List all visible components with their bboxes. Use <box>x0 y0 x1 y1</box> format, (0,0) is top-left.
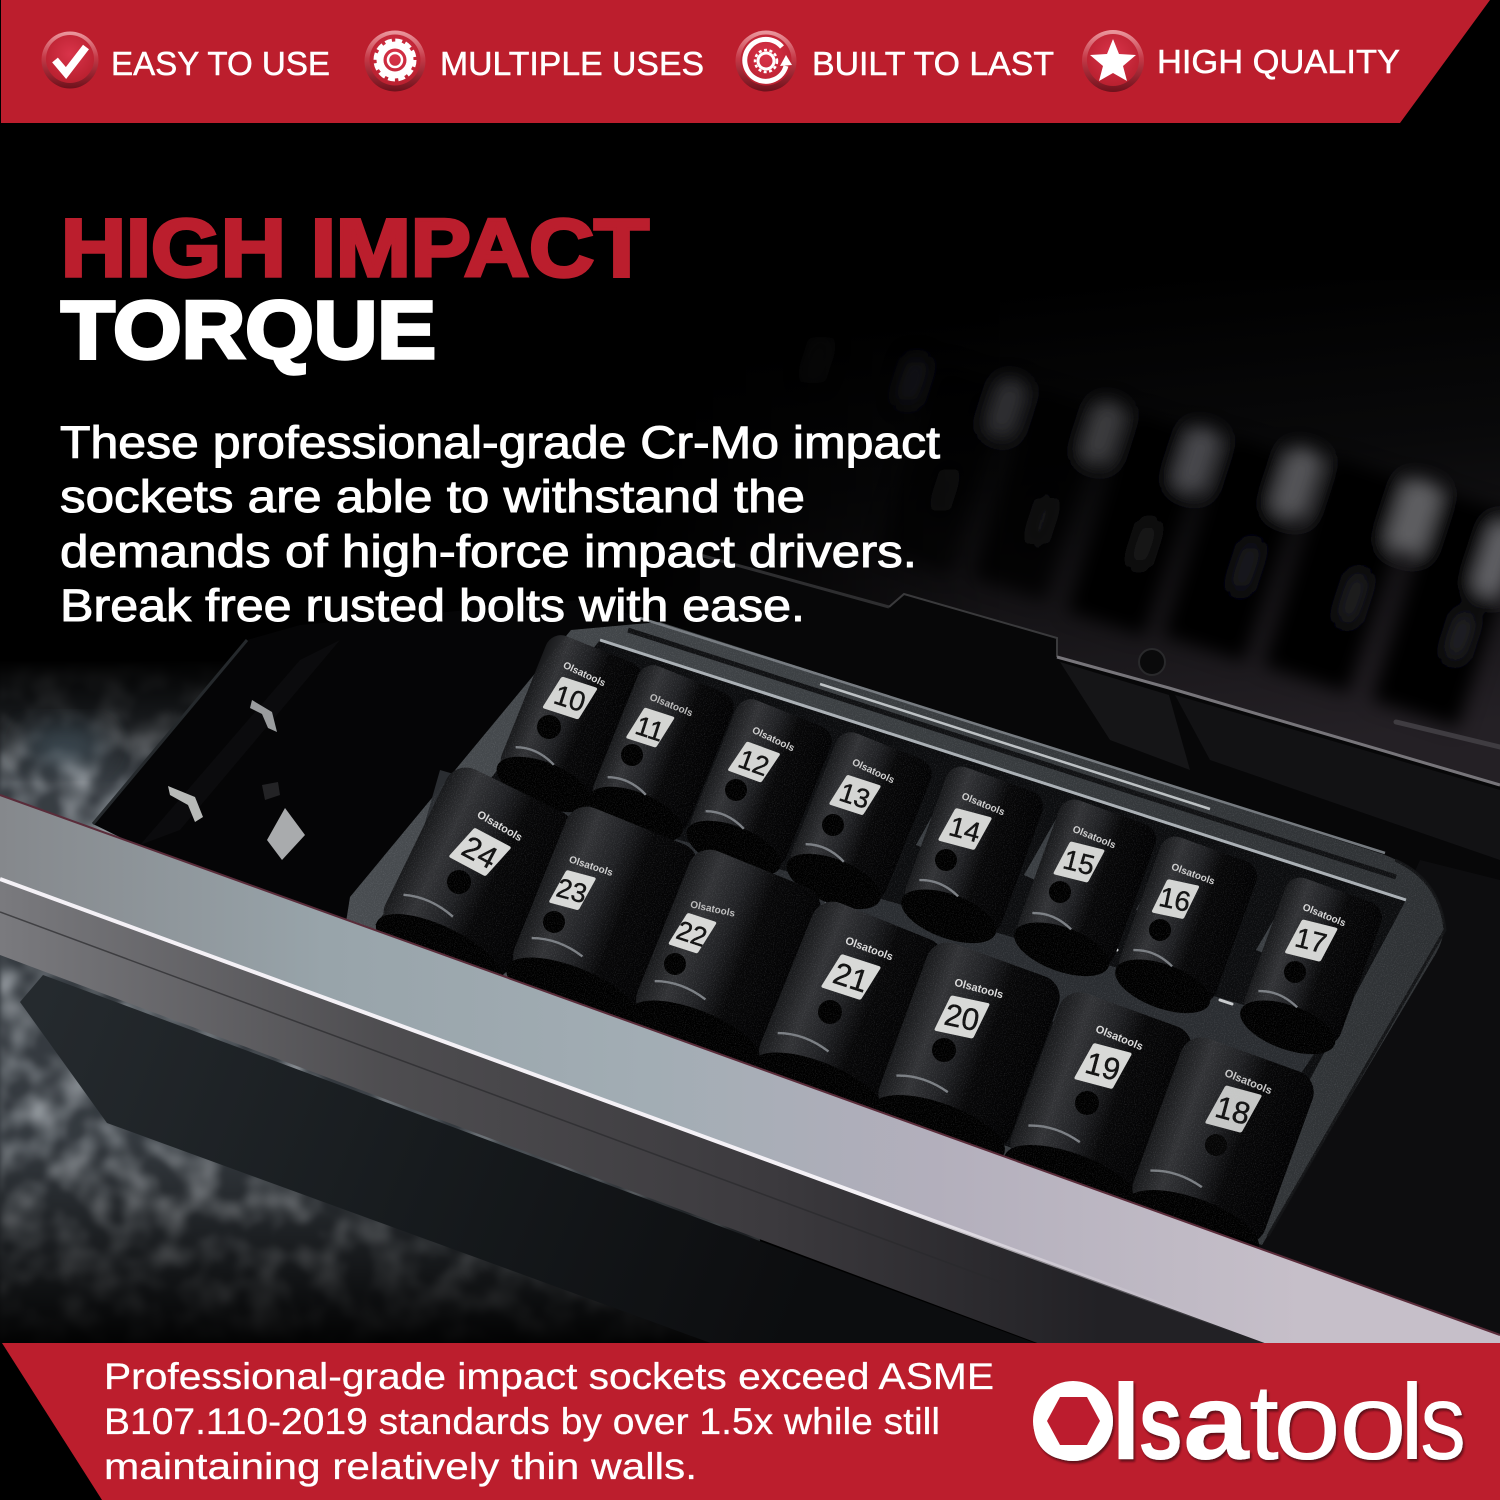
sockets, top row <box>489 630 1387 1066</box>
heading: HIGH IMPACT <box>61 203 649 294</box>
socket 10 <box>489 630 647 824</box>
socket 14: Olsatools <box>960 791 1007 818</box>
socket 21 <box>743 895 950 1138</box>
socket 22 <box>620 843 827 1086</box>
bottom red banner <box>2 1343 1500 1500</box>
socket 15: Olsatools <box>1071 824 1118 851</box>
logo: Olsatools <box>1029 1361 1466 1482</box>
icon: star button <box>1082 30 1144 92</box>
socket 13 <box>779 727 937 921</box>
icon: gear with cycle arrow button <box>736 30 796 92</box>
socket 23: Olsatools <box>567 854 615 879</box>
socket tray frame: 13 <box>819 892 841 913</box>
raised floor between socket rows <box>420 770 1330 1090</box>
socket 24: 24 <box>456 829 503 876</box>
socket 10: Olsatools <box>561 660 607 690</box>
body text: sockets are able to withstand the <box>60 471 805 522</box>
socket 24: Olsatools <box>475 809 524 844</box>
socket 17: 17 <box>1292 922 1330 959</box>
right side surface <box>1240 860 1500 1340</box>
socket 22: Olsatools <box>689 899 736 920</box>
socket 11: 11 <box>632 710 668 748</box>
socket 10: 10 <box>550 679 589 718</box>
standards text: maintaining relatively thin walls. <box>104 1446 697 1487</box>
body text: These professional-grade Cr-Mo impact <box>60 417 941 468</box>
embossed size numbers in tray: 12 <box>721 856 744 879</box>
socket 11 <box>581 660 739 854</box>
body text: Break free rusted bolts with ease. <box>60 580 805 631</box>
body text <box>60 417 941 631</box>
socket 16: 16 <box>1156 881 1193 918</box>
socket 14 <box>894 762 1048 955</box>
standards text: Professional-grade impact sockets exceed ASME <box>104 1356 994 1397</box>
lid of the case with clasp <box>700 555 1500 1000</box>
socket tray frame <box>340 618 1445 1245</box>
standards text: B107.110-2019 standards by over 1.5x while still <box>104 1401 940 1442</box>
socket 20: 20 <box>941 997 982 1038</box>
sockets, bottom row <box>366 760 1320 1273</box>
socket 17: Olsatools <box>1301 902 1348 929</box>
carpet floor <box>0 660 760 1350</box>
socket 17 <box>1233 873 1387 1066</box>
socket 21: 21 <box>829 956 873 999</box>
socket 13: 13 <box>836 777 874 815</box>
icon: gear button <box>364 30 426 92</box>
blurred sockets in the background <box>620 280 1500 860</box>
tray front face below the bar <box>20 975 1040 1345</box>
socket 15: 15 <box>1060 844 1098 881</box>
socket 18: 18 <box>1212 1089 1254 1132</box>
socket 14: 14 <box>946 810 984 848</box>
logo: Olsatools: t <box>1249 1361 1279 1482</box>
standards text <box>104 1356 994 1487</box>
socket 16: Olsatools <box>1170 862 1217 888</box>
feature: multiple uses: MULTIPLE USES <box>440 45 704 82</box>
socket 12: 12 <box>734 744 773 782</box>
socket 19: Olsatools <box>1094 1023 1145 1053</box>
logo: Olsatools: O <box>1029 1361 1113 1482</box>
socket 19 <box>996 986 1198 1228</box>
heading: TORQUE <box>61 285 436 376</box>
socket 20 <box>864 936 1066 1178</box>
socket 13: Olsatools <box>850 757 896 787</box>
logo: Olsatools: o <box>1339 1361 1407 1482</box>
logo: Olsatools: l <box>1111 1361 1141 1482</box>
silver tray edge bar <box>0 795 1500 1345</box>
socket 16 <box>1108 832 1262 1025</box>
socket 18: Olsatools <box>1223 1067 1274 1097</box>
socket 21: Olsatools <box>843 935 895 963</box>
feature: easy to use: EASY TO USE <box>111 45 330 82</box>
feature: multiple uses <box>364 30 704 92</box>
socket 12 <box>679 694 837 888</box>
heading <box>61 203 649 376</box>
logo: Olsatools: a <box>1183 1361 1250 1482</box>
logo: Olsatools: o <box>1273 1361 1341 1482</box>
socket 23: 23 <box>553 873 590 909</box>
body text: demands of high-force impact drivers. <box>60 526 917 577</box>
feature: built to last: BUILT TO LAST <box>812 45 1054 82</box>
socket 19: 19 <box>1082 1045 1124 1088</box>
socket 15 <box>1007 795 1161 988</box>
socket 20: Olsatools <box>953 977 1005 1001</box>
feature: high quality: HIGH QUALITY <box>1157 43 1400 80</box>
logo: Olsatools: l <box>1400 1361 1424 1482</box>
icon: check mark button <box>42 32 98 88</box>
top red banner <box>1 0 1490 123</box>
socket 22: 22 <box>673 915 711 953</box>
logo: Olsatools: s <box>1420 1361 1466 1482</box>
socket 23 <box>497 800 704 1043</box>
socket 18 <box>1118 1031 1320 1273</box>
feature: high quality <box>1082 30 1400 92</box>
feature: easy to use <box>42 32 330 88</box>
logo: Olsatools: s <box>1138 1361 1183 1482</box>
socket 12: Olsatools <box>750 725 796 755</box>
socket 24 <box>366 760 582 1007</box>
wedge fins behind top row sockets <box>628 676 1305 955</box>
socket 11: Olsatools <box>648 692 695 719</box>
feature: built to last <box>736 30 1054 92</box>
tray body left <box>93 600 720 1000</box>
